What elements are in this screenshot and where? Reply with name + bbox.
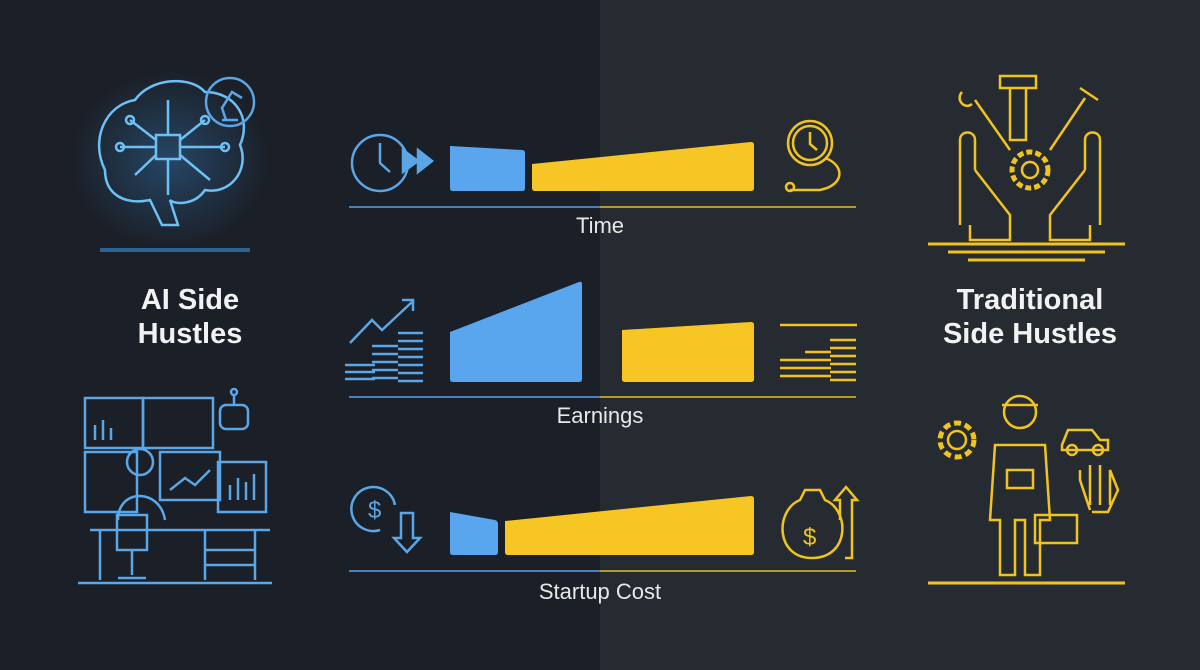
label: Earnings: Earnings — [557, 403, 643, 428]
icon: AI brain — [70, 70, 270, 250]
icon: rising coins — [345, 300, 423, 381]
title: Traditional Side Hustles: Side Hustles — [943, 318, 1117, 350]
row: Earnings — [345, 282, 857, 397]
icon: worker with tools — [928, 396, 1125, 583]
title: AI Side Hustles: AI Side — [141, 284, 239, 316]
label: Startup Cost: Startup Cost — [539, 579, 661, 604]
icon: AI desk workstation — [78, 389, 272, 583]
icon: money bag up: $ — [803, 524, 816, 551]
icon: cost down — [351, 487, 420, 552]
icon: money bag up — [783, 487, 857, 558]
label: Time: Time — [576, 213, 624, 238]
title: Traditional Side Hustles — [943, 284, 1117, 350]
row: Time — [349, 121, 856, 207]
icon: hands with tools — [928, 76, 1125, 260]
icon: cost down: $ — [368, 497, 381, 524]
icon: flat coins — [780, 325, 857, 380]
title: Traditional Side Hustles: Traditional — [957, 284, 1103, 316]
title: AI Side Hustles — [138, 284, 242, 350]
row: Startup Cost — [349, 487, 857, 571]
icon: robot arm circle — [206, 78, 254, 126]
icon: pocket watch — [786, 121, 839, 191]
icon: fast clock — [352, 135, 432, 191]
title: AI Side Hustles: Hustles — [138, 318, 242, 350]
